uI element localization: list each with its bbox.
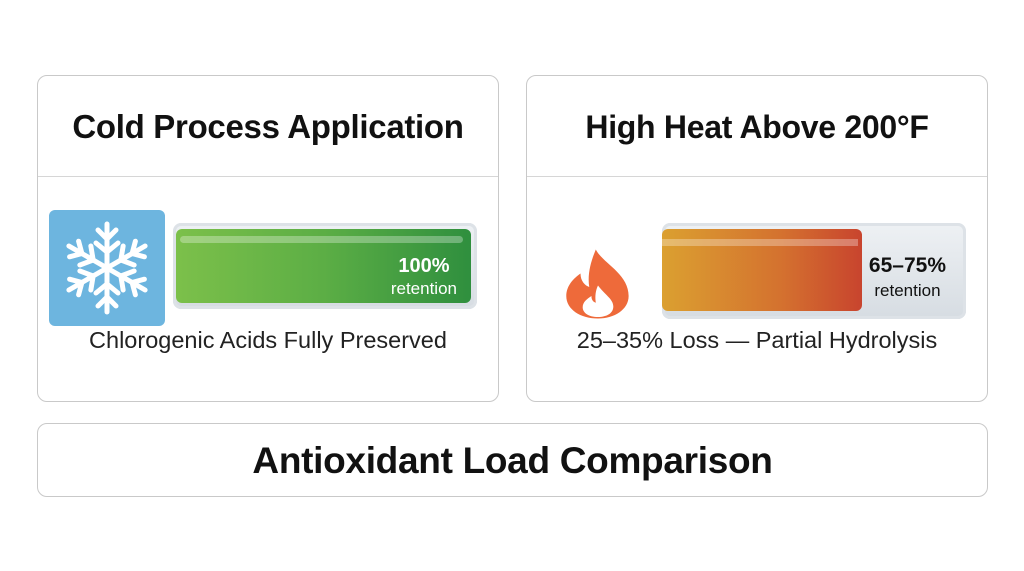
bar: 65-75% retention: 65–75% xyxy=(869,254,946,277)
heading: cold: Cold Process Application xyxy=(72,108,464,145)
bar: 65-75% retention: retention xyxy=(874,281,941,300)
panel: cold process xyxy=(37,75,499,402)
heading: heat: High Heat Above 200°F xyxy=(585,109,929,145)
bar: 100% retention: retention xyxy=(391,279,457,298)
footer title: Antioxidant Load Comparison xyxy=(252,440,773,481)
bar: 100% retention xyxy=(173,223,477,309)
caption: heat: 25–35% Loss — Partial Hydrolysis xyxy=(577,327,937,353)
panel: high heat xyxy=(526,75,988,402)
footer title xyxy=(37,423,988,497)
icon: snowflake xyxy=(49,210,165,326)
bar: 100% retention: 100% xyxy=(398,255,449,277)
icon: flame xyxy=(566,250,629,318)
bar: 65-75% retention xyxy=(662,223,966,319)
caption: cold: Chlorogenic Acids Fully Preserved xyxy=(89,327,447,353)
heading: heat xyxy=(527,76,987,177)
heading: cold xyxy=(38,76,498,177)
